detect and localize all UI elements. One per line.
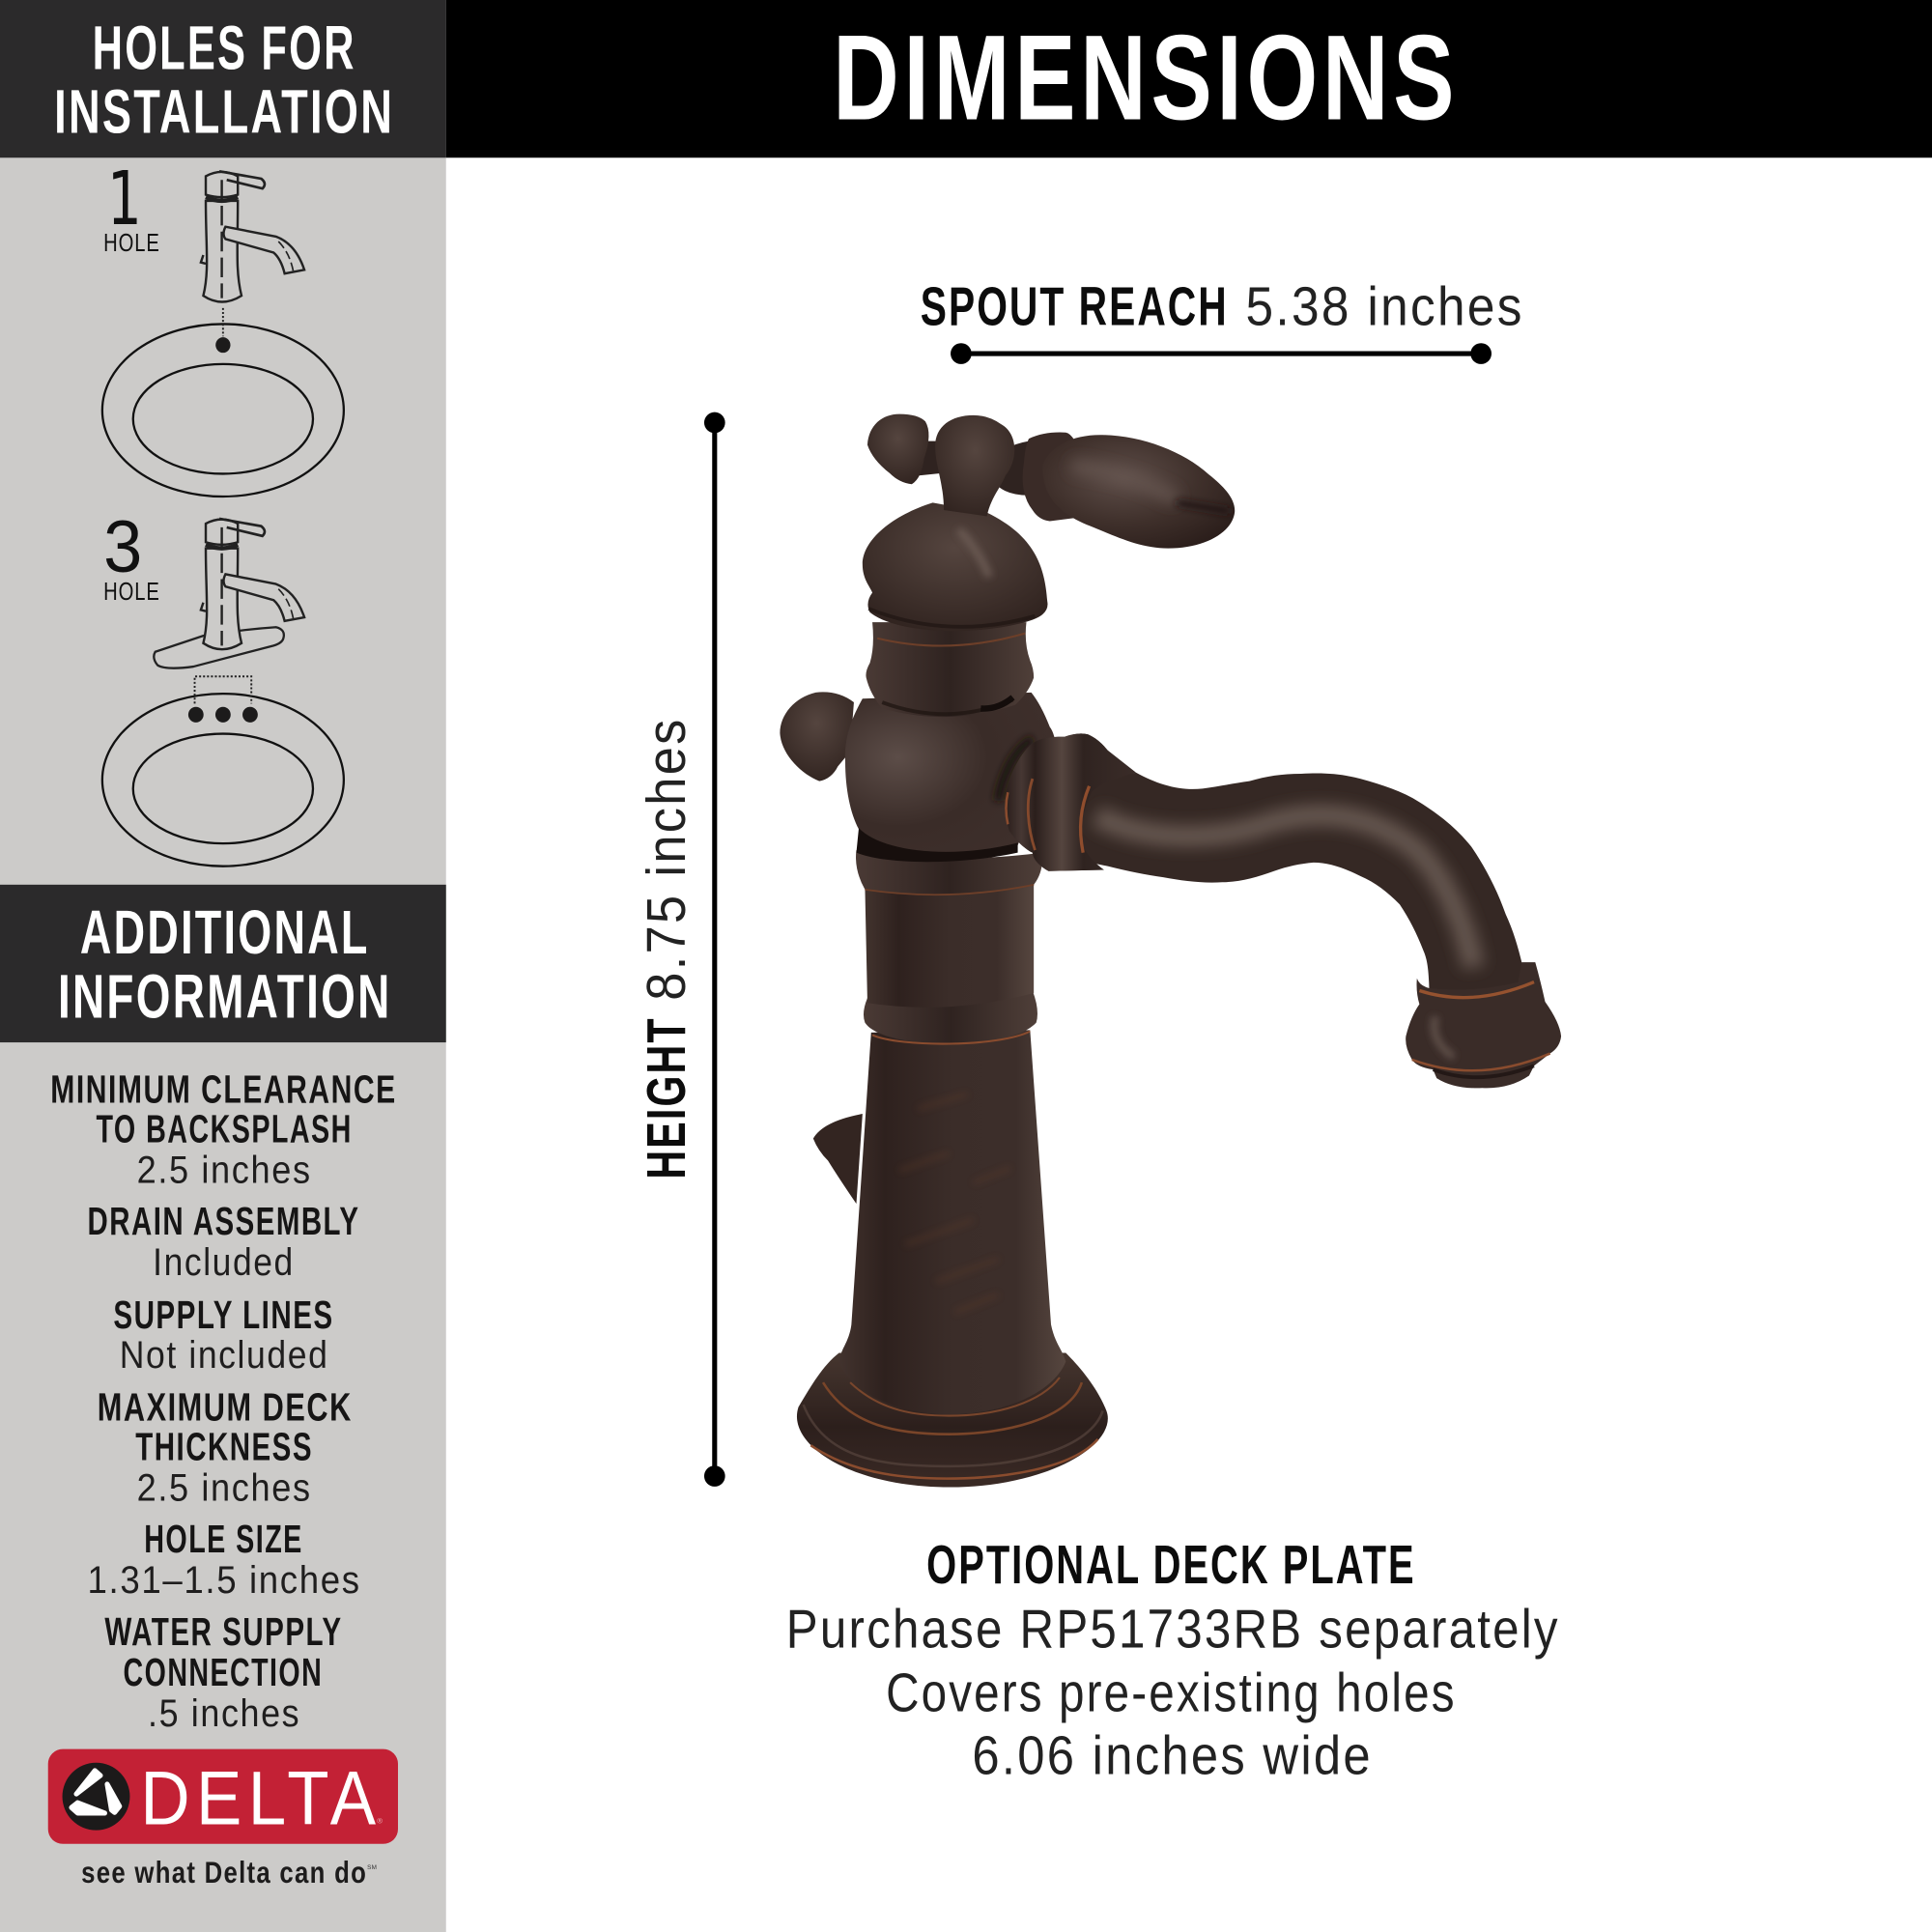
heading: additional information: ADDITIONAL xyxy=(80,897,370,967)
heading: additional information xyxy=(0,885,446,1042)
faucet: stepped base xyxy=(797,1353,1108,1488)
dimension: spout reach xyxy=(921,276,1524,364)
spec: drain assembly xyxy=(88,1199,359,1284)
faucet: lower column xyxy=(839,1030,1065,1416)
spec: maximum deck thickness: THICKNESS xyxy=(135,1424,313,1468)
dimension: spout reach: SPOUT REACH xyxy=(921,276,1229,337)
spec: drain assembly: DRAIN ASSEMBLY xyxy=(88,1199,359,1243)
faucet: egg-shaped lever handle xyxy=(1042,435,1235,549)
faucet: mid side knob xyxy=(780,692,854,781)
callout: optional deck plate: Covers pre-existing holes xyxy=(886,1662,1457,1723)
spec: supply lines xyxy=(113,1293,334,1377)
text block: additional information list xyxy=(50,1067,397,1735)
faucet: spout tube xyxy=(1060,773,1525,1001)
faucet: center ball and stem xyxy=(935,415,1014,516)
icon: single hole faucet line drawing xyxy=(201,171,304,301)
icon: delta circle mark xyxy=(63,1763,129,1831)
callout: optional deck plate: OPTIONAL DECK PLATE xyxy=(926,1534,1416,1595)
label: 3 hole xyxy=(103,506,160,606)
spec: minimum clearance: 2.5 inches xyxy=(137,1149,312,1191)
heading: holes for installation: HOLES FOR xyxy=(93,13,356,82)
dimension: spout reach: 5.38 inches xyxy=(1246,276,1524,337)
spec: water supply connection: WATER SUPPLY xyxy=(104,1609,343,1654)
icon: sink with three holes xyxy=(102,676,344,867)
spec: hole size xyxy=(88,1517,361,1602)
label: 1 hole: 1 xyxy=(107,156,142,242)
faucet: upper column xyxy=(865,882,1034,1008)
spec: minimum clearance xyxy=(50,1067,397,1191)
faucet: upper neck xyxy=(866,622,1034,717)
panel: left sidebar background xyxy=(0,0,446,1932)
spec: water supply connection: CONNECTION xyxy=(124,1650,323,1694)
label: 3 hole: HOLE xyxy=(103,579,160,606)
logo: delta badge: DELTA xyxy=(140,1754,382,1840)
faucet: lever connector xyxy=(992,433,1084,522)
faucet: dome xyxy=(863,502,1048,631)
faucet: ball body xyxy=(845,693,1057,862)
heading: dimensions: DIMENSIONS xyxy=(833,12,1459,146)
dimension: height xyxy=(636,412,725,1487)
spec: drain assembly: Included xyxy=(153,1241,295,1284)
spec: supply lines: SUPPLY LINES xyxy=(113,1293,334,1337)
label: 1 hole: HOLE xyxy=(103,230,160,257)
spec: supply lines: Not included xyxy=(120,1334,329,1377)
logo: delta badge xyxy=(48,1749,398,1844)
tagline: see what delta can do: see what Delta can do xyxy=(81,1855,367,1889)
spec: maximum deck thickness: MAXIMUM DECK xyxy=(98,1385,353,1430)
callout: optional deck plate: Purchase RP51733RB separately xyxy=(786,1598,1560,1659)
faucet: top left knob xyxy=(867,414,943,484)
spec: hole size: HOLE SIZE xyxy=(144,1517,303,1561)
spec: water supply connection: .5 inches xyxy=(148,1692,300,1735)
spec: water supply connection xyxy=(104,1609,343,1735)
heading: holes for installation: INSTALLATION xyxy=(54,77,394,147)
dimension: height: 8.75 inches xyxy=(636,717,696,1001)
diagram: 3 hole installation xyxy=(102,506,344,867)
faucet: collar xyxy=(856,850,1042,895)
faucet: drain lift rod xyxy=(813,1114,863,1204)
faucet: aerator xyxy=(1406,962,1561,1088)
spec: hole size: 1.31–1.5 inches xyxy=(88,1559,361,1602)
arrow: spout reach line xyxy=(951,343,1492,364)
callout: optional deck plate: 6.06 inches wide xyxy=(972,1725,1373,1786)
faucet: spout collar xyxy=(998,733,1136,871)
spec: minimum clearance: MINIMUM CLEARANCE xyxy=(50,1067,397,1112)
diagram: 1 hole installation xyxy=(102,156,344,497)
spec: minimum clearance: TO BACKSPLASH xyxy=(96,1106,353,1151)
heading: additional information: INFORMATION xyxy=(58,962,392,1032)
heading: holes for installation xyxy=(0,0,446,157)
dimension: height: HEIGHT xyxy=(636,1016,696,1179)
illustration: oil rubbed bronze faucet xyxy=(780,414,1561,1488)
icon: three hole faucet line drawing xyxy=(201,519,304,649)
spec: maximum deck thickness xyxy=(98,1385,353,1510)
spec: maximum deck thickness: 2.5 inches xyxy=(137,1467,312,1510)
logo: delta badge: ® xyxy=(377,1817,383,1826)
heading: dimensions xyxy=(446,0,1932,157)
icon: deck plate xyxy=(154,627,284,668)
label: 3 hole: 3 xyxy=(103,506,146,588)
arrow: height line xyxy=(704,412,725,1487)
tagline: see what delta can do: SM xyxy=(367,1864,377,1871)
icon: sink with one hole xyxy=(102,308,344,497)
faucet: mid ring xyxy=(864,991,1037,1044)
callout: optional deck plate xyxy=(786,1534,1560,1786)
